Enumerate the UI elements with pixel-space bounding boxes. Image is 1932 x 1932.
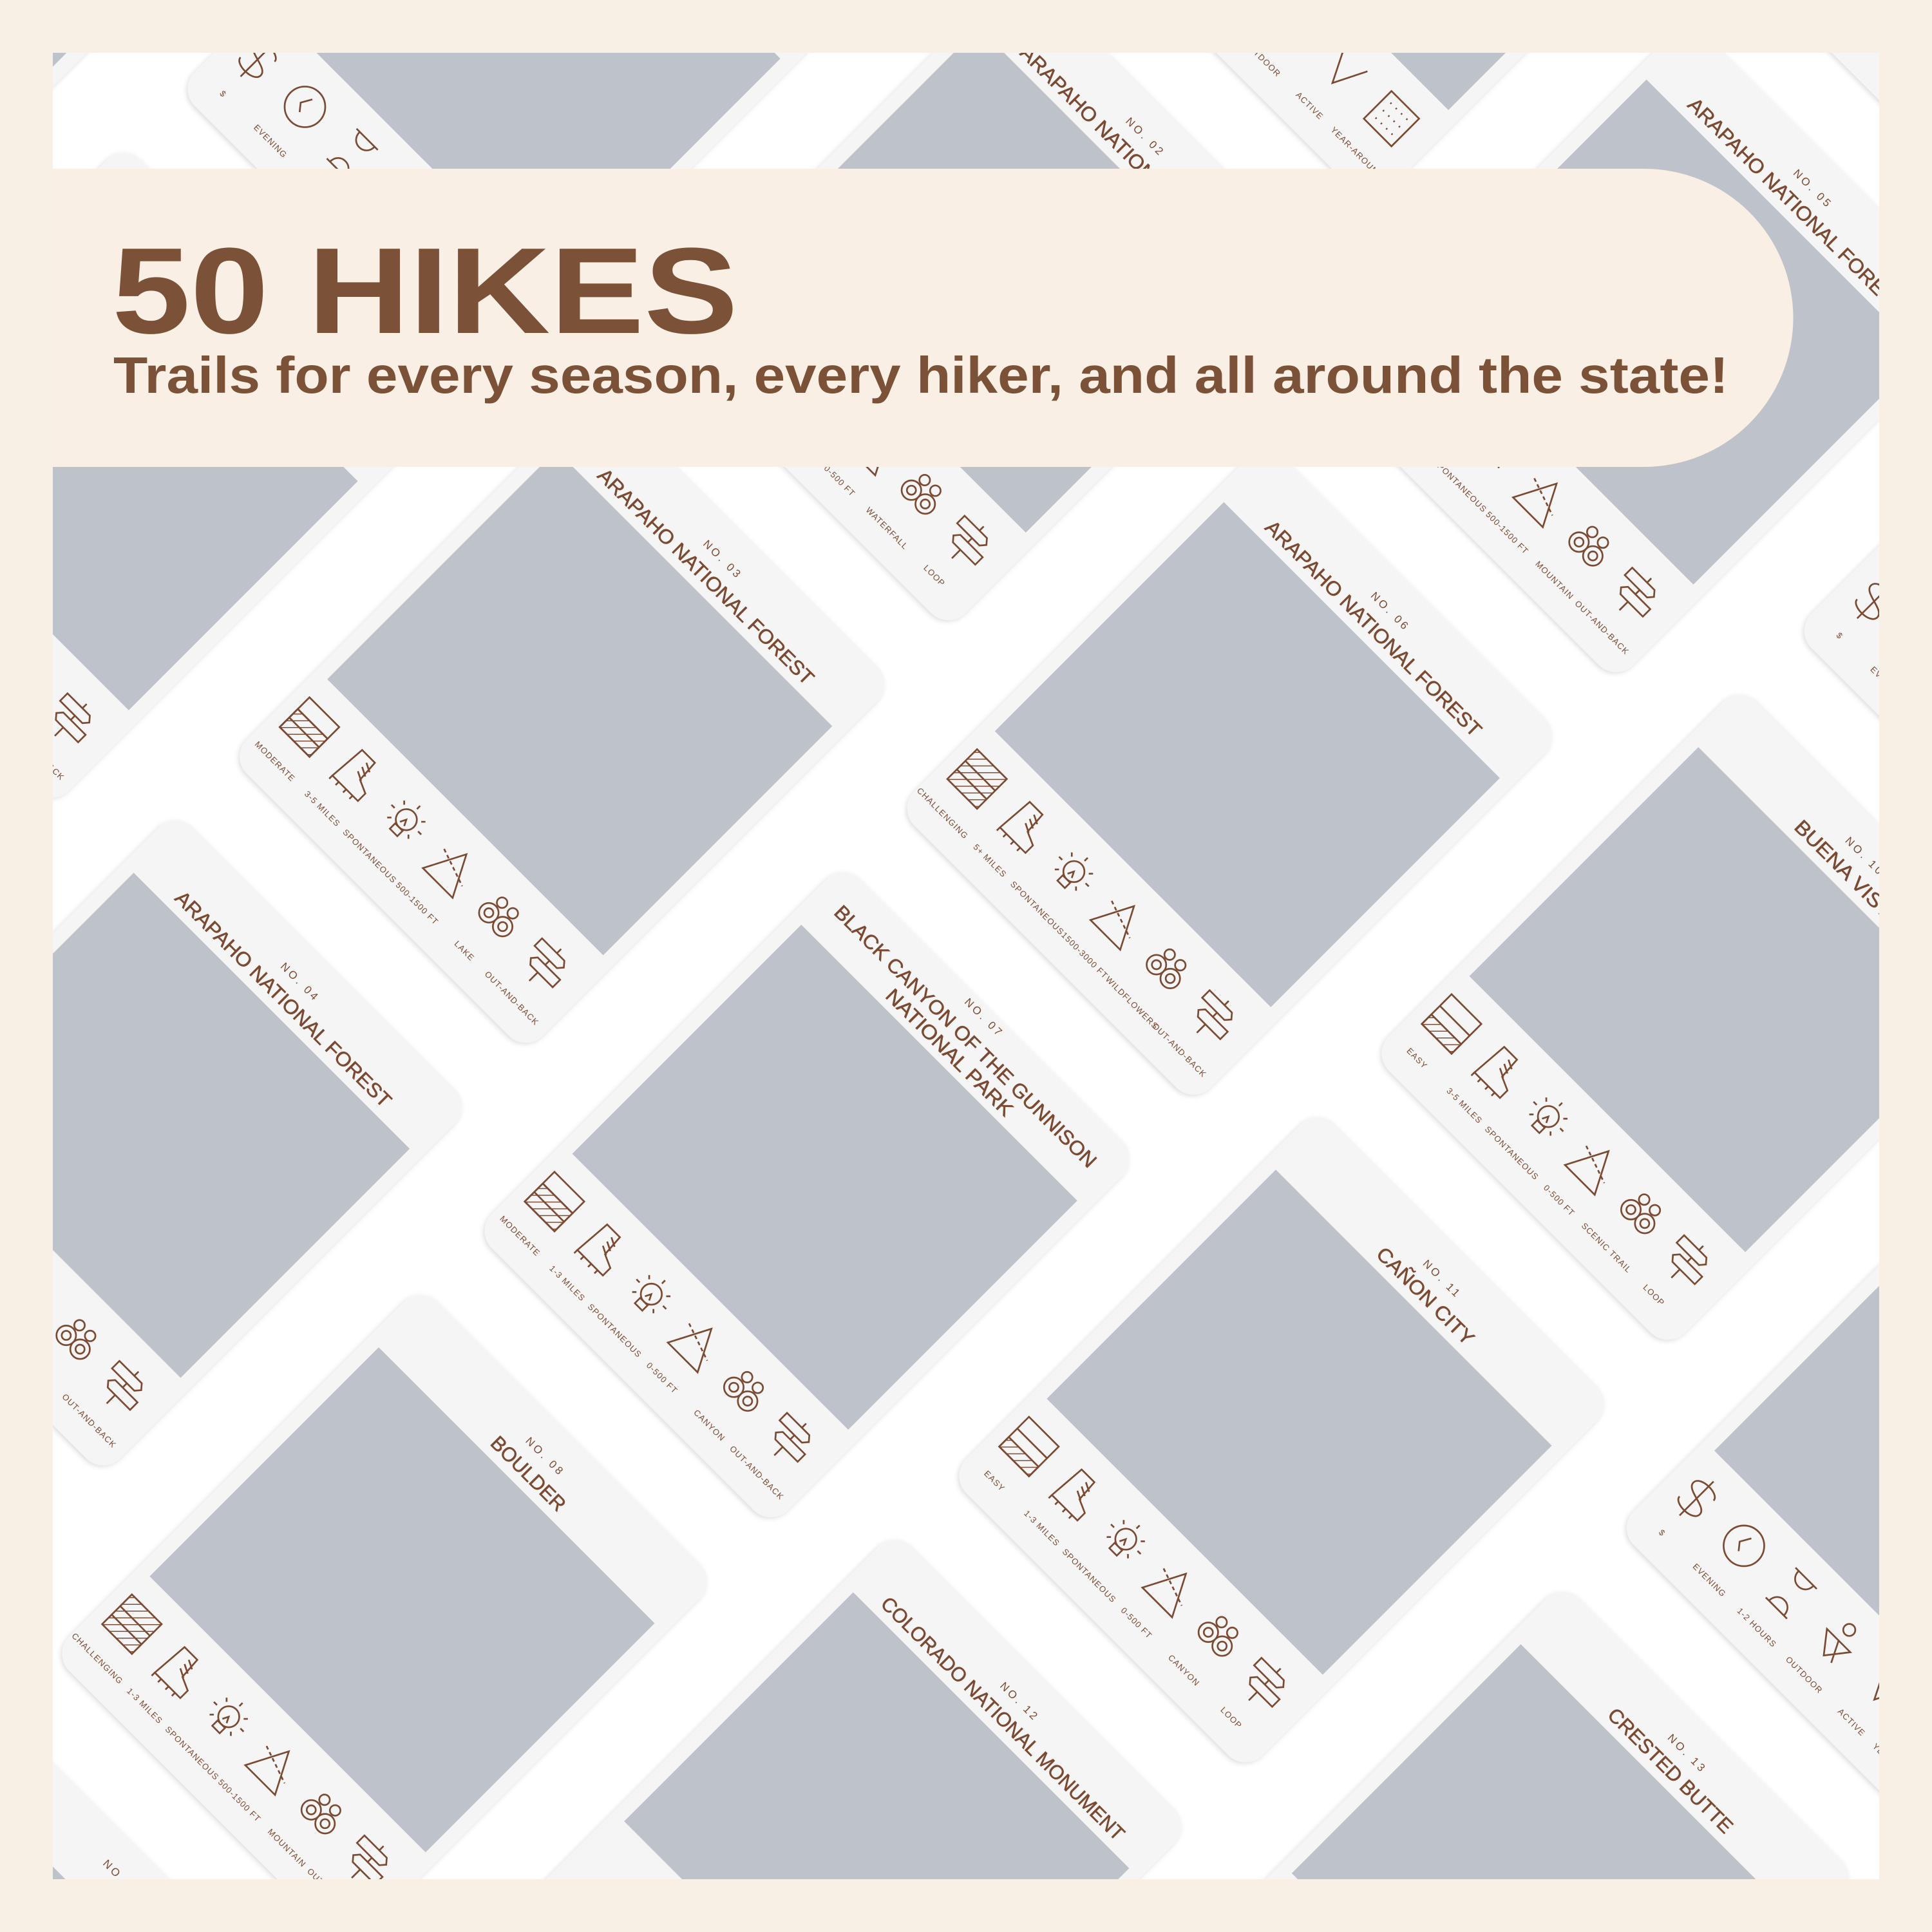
card: no. 10 buena vista: BUENA VISTA: [1790, 815, 1906, 932]
card: no. 05: NO. 05: [1791, 167, 1835, 211]
card: no. 10 buena vista: EASY: [1405, 1046, 1430, 1071]
card: no. 06: ARAPAHO NATIONAL FOREST: [1261, 516, 1486, 741]
card: no. 10 buena vista: [1372, 685, 1932, 1350]
card: no. 02: 1-3 MILES: [725, 366, 765, 406]
card: no. 03: 500-1500 FT: [394, 880, 440, 927]
card: no. 03: SPONTANEOUS: [341, 828, 399, 885]
card: no. 13: [1194, 1582, 1859, 1932]
card: no. 11: CANYON: [1166, 1653, 1202, 1688]
card: back right: ACTIVE: [1836, 1707, 1868, 1738]
card: no. 06: SPONTANEOUS: [1009, 879, 1066, 937]
card: back top: ACTIVE: [1294, 90, 1325, 122]
card: no. 08: CHALLENGING: [70, 1631, 125, 1686]
banner: [53, 169, 1793, 467]
card: no. 10 buena vista: SCENIC TRAIL: [1580, 1221, 1634, 1275]
card: back top-left: YEAR-AROUND: [431, 303, 488, 359]
card: no. 11: CAÑON CITY: [1372, 1242, 1479, 1350]
card: back top: YEAR-AROUND: [1329, 125, 1385, 182]
card: back right: [1617, 1159, 1932, 1824]
card: no. 12: NO. 12: [998, 1680, 1042, 1724]
card: no. 06: CHALLENGING: [915, 786, 971, 841]
card: no. 05: 500-1500 FT: [1484, 509, 1531, 556]
card: no. 03: LAKE: [453, 939, 477, 963]
card: no. 05: OUT-AND-BACK: [1573, 598, 1631, 657]
card: left edge: [53, 153, 394, 800]
card: no. 03: MODERATE: [253, 739, 298, 784]
card: no. 08: OUT-AND-BACK: [305, 1866, 363, 1924]
card: corner bottom right: [1669, 1827, 1932, 1932]
card: no. 05: ARAPAHO NATIONAL FOREST: [1683, 93, 1909, 319]
card: no. 11: LOOP: [1218, 1705, 1244, 1730]
card: no. 06: [897, 440, 1562, 1104]
card: back right: 1-2 HOURS: [1735, 1606, 1779, 1649]
card: no. 05: 5+ MILES: [1394, 419, 1432, 457]
card: corner bottom left: [53, 1762, 170, 1879]
card: no. 11: 1-3 MILES: [1022, 1508, 1062, 1548]
card: back right top: [1802, 544, 1879, 721]
card: no. 03: NO. 03: [701, 538, 745, 582]
card: back top-left: 1-2 HOURS: [296, 167, 339, 210]
card: no. 03: ARAPAHO NATIONAL FOREST: [593, 464, 819, 689]
card: no. 10 buena vista: NO. 10: [1842, 835, 1887, 878]
card: no. 02: WATERFALL: [864, 505, 910, 551]
card: no. 03: 3-5 MILES: [303, 789, 343, 829]
card: no. 02: NO. 02: [1123, 115, 1168, 159]
subtitle: Trails for every season, every hiker, and all around the state!: [113, 346, 1728, 404]
card: corner top right: [1826, 53, 1879, 106]
card: no. 08: SPONTANEOUS: [164, 1725, 221, 1782]
card: no. 02: LOOP: [922, 563, 947, 589]
card: no. 13: CRESTED BUTTE: [1603, 1703, 1738, 1838]
card: no. 04: OUT-AND-BACK: [61, 1392, 118, 1450]
card: no. 07: OUT-AND-BACK: [728, 1444, 786, 1502]
card: no. 12: COLORADO NATIONAL MONUMENT: [876, 1592, 1129, 1845]
card: no. 11: [949, 1107, 1614, 1772]
card: no. 04: ARAPAHO NATIONAL FOREST: [171, 886, 396, 1112]
card: no. 07: 0-500 FT: [645, 1360, 680, 1396]
card: no. 11: NO. 11: [1421, 1258, 1464, 1301]
card: no. 06: WILDFLOWERS: [1104, 974, 1160, 1031]
card: no. 06: 5+ MILES: [971, 842, 1009, 880]
card: back top-left: OUTDOOR: [345, 216, 386, 256]
card: no. 03: OUT-AND-BACK: [483, 969, 541, 1027]
card: back top-left: ACTIVE: [397, 267, 428, 299]
card: no. 08: BOULDER: [486, 1432, 571, 1516]
card: no. 08: 500-1500 FT: [216, 1777, 263, 1824]
card: no. 06: 1500-3000 FT: [1059, 930, 1110, 981]
card: no. 03: [237, 467, 885, 1046]
card: no. 02: 0-500 FT: [822, 463, 857, 498]
card: back top: [1211, 53, 1528, 169]
card: no. 07: SPONTANEOUS: [586, 1302, 644, 1359]
card: no. 10 buena vista: 3-5 MILES: [1444, 1086, 1484, 1126]
card: corner far left: [53, 53, 89, 89]
card: left edge: ARAPAHO NATIONAL FOREST: [118, 219, 344, 444]
card: no. 12: [527, 1530, 1191, 1932]
title: 50 HIKES: [112, 223, 738, 359]
card: no. 07: NO. 07: [962, 996, 1006, 1040]
card: no. 05: MOUNTAIN: [1533, 559, 1576, 601]
card: no. 11: SPONTANEOUS: [1061, 1547, 1118, 1605]
card: no. 04: [53, 820, 462, 1468]
card: back top: OUTDOOR: [1242, 38, 1283, 79]
card: back right top: $: [1835, 630, 1845, 641]
card: back right: OUTDOOR: [1784, 1654, 1824, 1696]
card: back right: YEAR-AROUND: [1871, 1741, 1927, 1798]
card: no. 05: [1396, 53, 1879, 675]
card: corner bottom left: NO. 09: [100, 1857, 145, 1902]
card: no. 10 buena vista: SPONTANEOUS: [1483, 1124, 1541, 1182]
card: no. 07: MODERATE: [498, 1214, 542, 1258]
card: back top-left: EVENING: [252, 122, 289, 160]
card: no. 07: BLACK CANYON OF THE GUNNISON: [829, 901, 1101, 1172]
card: no. 04: LAKE: [30, 1361, 54, 1385]
card: no. 05: CHALLENGING: [1338, 363, 1393, 419]
card: no. 02: MODERATE: [676, 317, 720, 361]
card: no. 02: [780, 53, 1225, 623]
card: no. 10 buena vista: 0-500 FT: [1542, 1183, 1577, 1218]
card: no. 07: NATIONAL PARK: [881, 984, 1018, 1121]
card: left edge: OUT-AND-BACK: [8, 724, 66, 782]
card: no. 11: EASY: [982, 1468, 1007, 1493]
card: no. 04: NO. 04: [278, 960, 322, 1005]
card: no. 07: CANYON: [692, 1408, 727, 1443]
card: no. 06: NO. 06: [1368, 589, 1412, 634]
card: left edge: NO. 01: [226, 292, 270, 337]
card: back right: $: [1657, 1528, 1667, 1539]
card: no. 08: 1-3 MILES: [125, 1686, 165, 1726]
card: no. 07: 1-3 MILES: [547, 1264, 587, 1303]
card: back right: EVENING: [1691, 1562, 1728, 1599]
card: no. 08: MOUNTAIN: [266, 1827, 308, 1869]
card: no. 06: OUT-AND-BACK: [1150, 1021, 1209, 1079]
card: no. 13: NO. 13: [1665, 1732, 1709, 1776]
card: back top-left: [185, 53, 809, 169]
card: no. 05: SPONTANEOUS: [1431, 457, 1489, 515]
card: no. 07: [475, 862, 1140, 1527]
card: back right top: EVENING: [1868, 665, 1906, 702]
card: back top-left: $: [218, 88, 229, 99]
card: no. 08: NO. 08: [523, 1435, 567, 1479]
card: no. 08: [59, 1294, 707, 1879]
card: no. 10 buena vista: LOOP: [1642, 1282, 1667, 1308]
card: no. 02: SPONTANEOUS: [764, 404, 821, 462]
card: no. 11: 0-500 FT: [1119, 1605, 1154, 1641]
card: no. 02: ARAPAHO NATIONAL FOREST: [1016, 41, 1241, 267]
